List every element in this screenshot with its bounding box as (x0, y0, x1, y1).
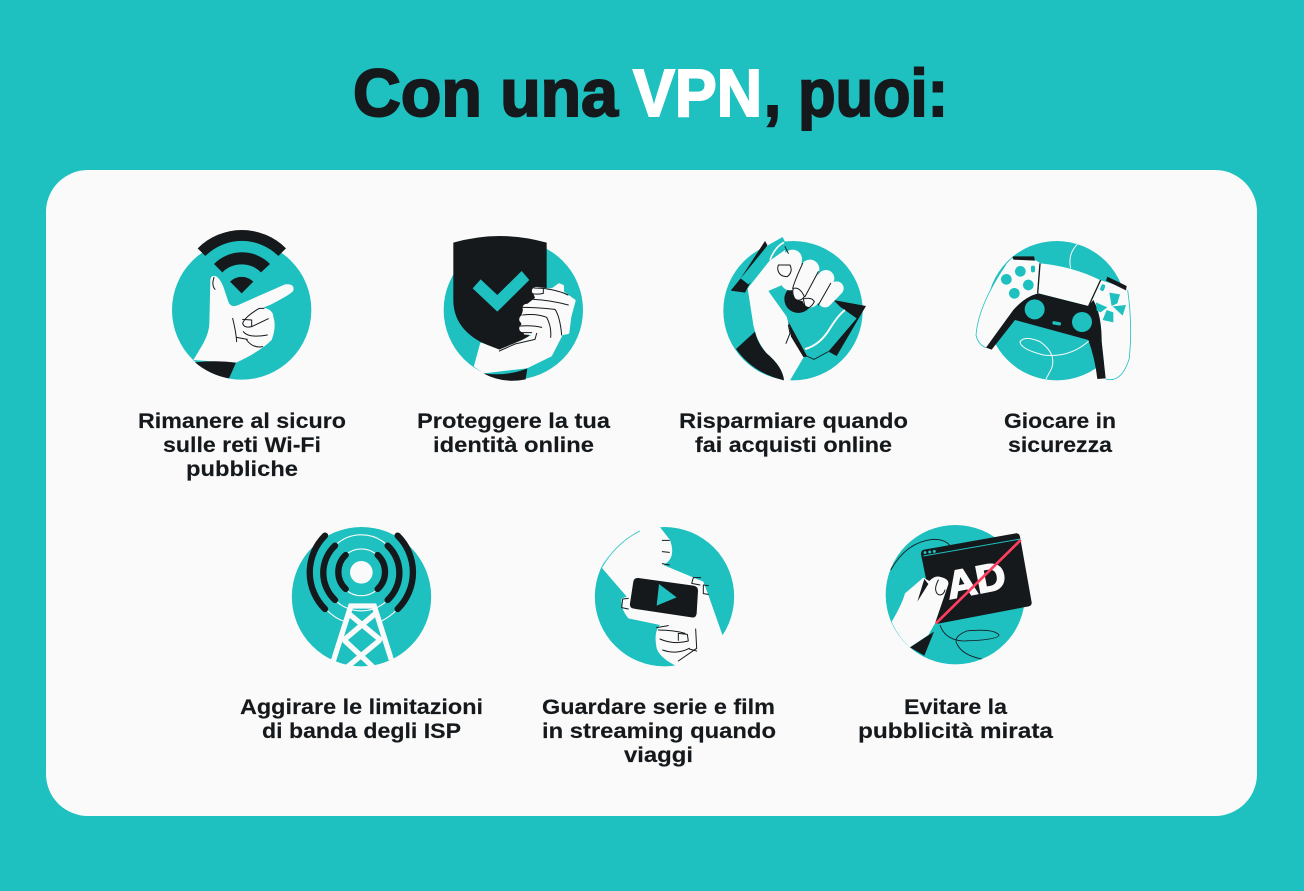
icon: crossed-out ad window: AD (943, 554, 1009, 608)
caption: pubbliche (186, 457, 298, 481)
title (353, 56, 948, 131)
icon: hand and Wi-Fi signal (172, 230, 311, 380)
title: , puoi: (764, 56, 948, 131)
caption: sicurezza (1008, 433, 1113, 457)
caption (138, 409, 346, 481)
caption: Proteggere la tua (417, 409, 611, 433)
item: streaming while travelling (542, 525, 776, 767)
caption: sulle reti Wi-Fi (163, 433, 321, 457)
item: online shopping savings (679, 237, 908, 457)
caption: Guardare serie e film (542, 695, 775, 719)
caption: Rimanere al sicuro (138, 409, 346, 433)
icon: hand gripping banknote (723, 237, 866, 380)
icon: crossed-out ad window (886, 525, 1032, 664)
caption: pubblicità mirata (858, 719, 1054, 743)
icon: signal tower (292, 527, 431, 667)
item: ISP throttling (240, 527, 483, 743)
caption: Giocare in (1004, 409, 1116, 433)
caption: Risparmiare quando (679, 409, 908, 433)
caption (542, 695, 776, 767)
caption: viaggi (624, 743, 693, 767)
icon: game controller (976, 241, 1131, 380)
caption: fai acquisti online (695, 433, 892, 457)
title: Con una (353, 56, 619, 131)
caption: di banda degli ISP (262, 719, 461, 743)
caption: Aggirare le limitazioni (240, 695, 483, 719)
item: safe gaming (976, 241, 1131, 457)
title: VPN (633, 56, 762, 131)
icon: hand holding shield (444, 236, 583, 381)
caption (679, 409, 908, 457)
item: identity protection (417, 236, 611, 457)
icon: hands framing video (595, 525, 734, 667)
caption (240, 695, 483, 743)
caption: in streaming quando (542, 719, 776, 743)
caption: Evitare la (904, 695, 1008, 719)
item: avoid targeted ads (858, 525, 1054, 743)
caption (858, 695, 1054, 743)
item: public Wi-Fi (138, 230, 346, 481)
panel: benefits (46, 170, 1257, 816)
caption (417, 409, 611, 457)
caption: identità online (433, 433, 594, 457)
caption (1004, 409, 1116, 457)
